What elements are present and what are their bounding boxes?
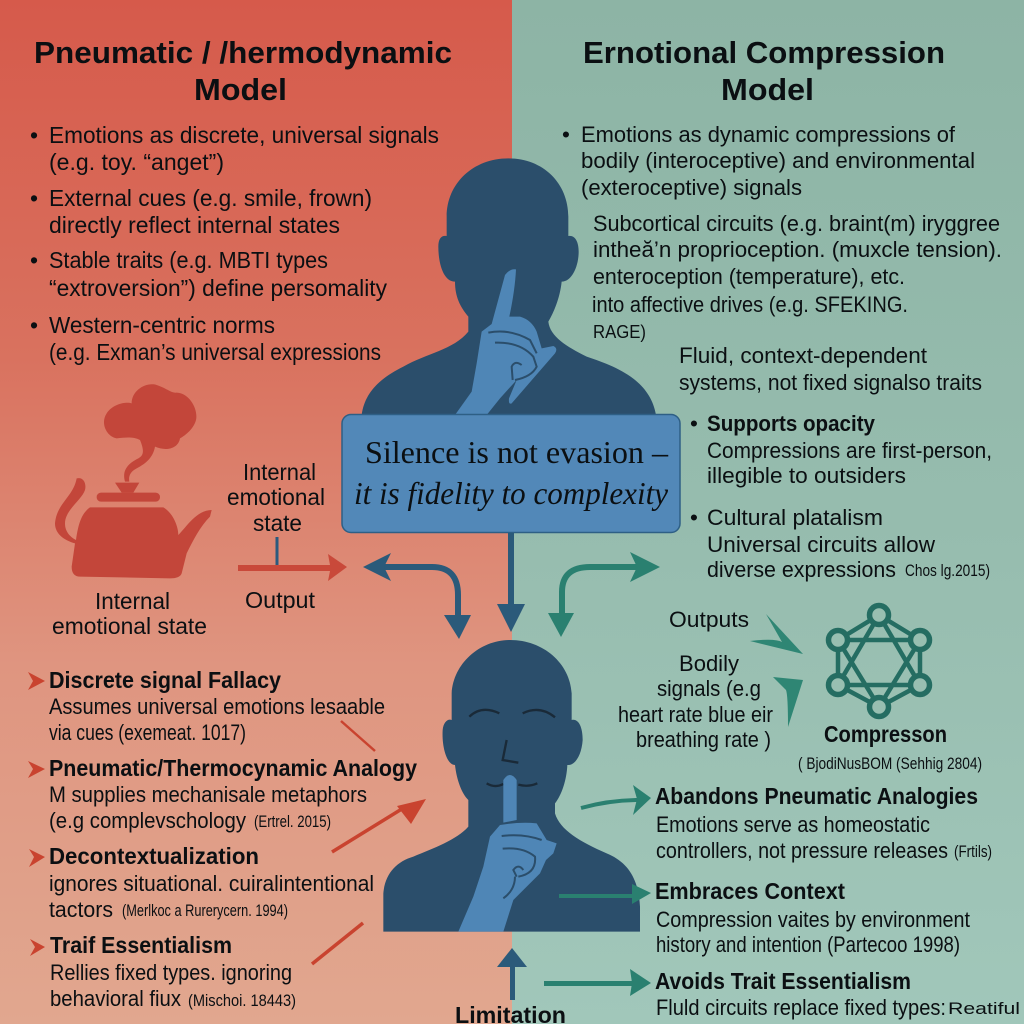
- advantage: embraces context: [655, 878, 971, 957]
- advantage: avoids trait essentialism: Fluld circuits replace fixed types:: [656, 995, 946, 1020]
- advantage: abandons pneumatic analogies: (Frtils): [954, 843, 992, 861]
- right bullet list and paragraphs: Emotions as dynamic compressions of: [581, 122, 956, 147]
- limitation: trait essentialism: Rellies fixed types. ignoring: [50, 960, 292, 985]
- label: internal emotional state (arrow): [227, 459, 325, 536]
- label: bodily signals: breathing rate ): [636, 727, 771, 752]
- limitation: trait essentialism: (Mischoi. 18443): [188, 992, 296, 1010]
- right bullet list and paragraphs: into affective drives (e.g. SFEKING.: [592, 292, 908, 317]
- panel: right background: [512, 0, 1024, 1024]
- right bullet list and paragraphs: Compressions are first-person,: [707, 438, 992, 463]
- limitation: decontextualization: (Merlkoc a Rurerycern. 1994): [122, 902, 288, 920]
- label: bodily signals: signals (e.g: [657, 676, 761, 701]
- right title: [583, 35, 945, 107]
- limitation: discrete signal fallacy: Discrete signal Fallacy: [49, 667, 281, 693]
- advantage: avoids trait essentialism: Reatiful: [948, 1000, 1020, 1018]
- label: compression: Compresson: [824, 721, 947, 747]
- left bullet list: •: [30, 247, 38, 273]
- limitation: thermodynamic analogy: (e.g complevschology: [49, 808, 247, 833]
- left bullet list: •: [30, 312, 38, 338]
- limitation: thermodynamic analogy: Pneumatic/Thermocynamic Analogy: [49, 755, 417, 781]
- advantage: abandons pneumatic analogies: [655, 783, 992, 863]
- right bullet list and paragraphs: (exteroceptive) signals: [581, 175, 802, 200]
- arrow: bodily signals to compression: [773, 677, 803, 727]
- right bullet list and paragraphs: bodily (interoceptive) and environmental: [581, 148, 975, 173]
- right bullet list and paragraphs: diverse expressions: [707, 557, 896, 582]
- label: internal emotional state (kettle): emotional state: [52, 613, 207, 639]
- center quote box: [342, 414, 680, 532]
- left bullet list: •: [30, 185, 38, 211]
- left bullet list: directly reflect internal states: [49, 212, 340, 238]
- label: bodily signals: [618, 651, 773, 752]
- connector arrow: center down: [497, 533, 525, 632]
- panel: left background: [0, 0, 512, 1024]
- right bullet list and paragraphs: [562, 122, 1002, 582]
- label: internal emotional state (arrow): state: [253, 510, 302, 536]
- arrow: to abandons pneumatic analogies: [581, 785, 651, 815]
- label: bodily signals: Bodily: [679, 651, 740, 676]
- advantage: embraces context: history and intention (Parteсoo 1998): [656, 932, 960, 957]
- right bullet list and paragraphs: •: [562, 122, 570, 147]
- left title: Pneumatic / /hermodynamic: [34, 35, 452, 70]
- icon: bottom silent figure: [383, 640, 640, 932]
- icon: compression network: [828, 606, 930, 716]
- label: internal emotional state (kettle): [52, 588, 207, 639]
- limitation: trait essentialism: Traif Essentialism: [50, 932, 232, 958]
- limitation: thermodynamic analogy: [28, 755, 417, 833]
- arrow: output: [238, 554, 347, 581]
- limitation: decontextualization: ignores situational. cuiralintentional: [49, 871, 374, 896]
- right bullet list and paragraphs: enteroception (temperature), etc.: [593, 264, 905, 289]
- arrow: outputs to compression: [750, 614, 803, 654]
- advantage: abandons pneumatic analogies: controllers, not pressure releases: [656, 838, 948, 863]
- limitation: discrete signal fallacy: [28, 667, 385, 745]
- center quote box: it is fidelity to complexity: [354, 475, 669, 511]
- label: internal emotional state (kettle): Internal: [95, 588, 170, 614]
- right bullet list and paragraphs: Cultural platalism: [707, 505, 883, 530]
- center quote box: Silence is not evasion –: [365, 434, 669, 470]
- left bullet list: Western-centric norms: [49, 312, 275, 338]
- label: outputs: Outputs: [669, 607, 749, 632]
- section: compression advantages: [655, 783, 1020, 1020]
- left title: Model: [194, 72, 287, 107]
- right title: Model: [721, 72, 814, 107]
- right bullet list and paragraphs: Chos lg.2015): [905, 562, 990, 580]
- left bullet list: (e.g. toy. “anget”): [49, 149, 224, 175]
- right bullet list and paragraphs: •: [690, 411, 698, 436]
- advantage: avoids trait essentialism: Avoids Trait Essentialism: [655, 968, 911, 994]
- arrow: to avoids trait essentialism: [544, 969, 651, 996]
- left bullet list: External cues (e.g. smile, frown): [49, 185, 372, 211]
- right bullet list and paragraphs: intheă’n proprioception. (muxcle tension).: [593, 237, 1002, 262]
- icon: whistling kettle with steam: [55, 384, 212, 578]
- left bullet list: (e.g. Exman’s universal expressions: [49, 339, 381, 365]
- advantage: abandons pneumatic analogies: Abandons Pneumatic Analogies: [655, 783, 978, 809]
- icon: tick line: [276, 537, 278, 565]
- red pointer lines: [312, 721, 426, 964]
- right bullet list and paragraphs: illegible to outsiders: [707, 463, 906, 488]
- label: compression: ( BjodiNusBOM (Sehhig 2804): [798, 755, 982, 773]
- limitation: discrete signal fallacy: Assumes universal emotions lesaable: [49, 694, 385, 719]
- left bullet list: •: [30, 122, 38, 148]
- advantage: embraces context: Compression vaites by environment: [656, 907, 971, 932]
- limitation: decontextualization: [29, 843, 374, 922]
- right bullet list and paragraphs: systems, not fixed signalso traits: [679, 370, 982, 395]
- right bullet list and paragraphs: RAGE): [593, 322, 646, 342]
- label: output: Output: [245, 587, 316, 613]
- left bullet list: [30, 122, 439, 365]
- limitation: discrete signal fallacy: via cues (exemeat. 1017): [49, 720, 246, 745]
- left bullet list: Stable traits (e.g. MBTI types: [49, 247, 328, 273]
- advantage: embraces context: Embraces Context: [655, 878, 845, 904]
- limitation: trait essentialism: [30, 932, 296, 1011]
- right bullet list and paragraphs: Universal circuits allow: [707, 532, 936, 557]
- label: internal emotional state (arrow): emotional: [227, 484, 325, 510]
- arrow: limitation upward: [497, 948, 527, 1000]
- connector arrow: dark double-headed: [363, 553, 471, 639]
- left bullet list: “extroversion”) define persomality: [49, 275, 387, 301]
- label: internal emotional state (arrow): Internal: [243, 459, 316, 485]
- advantage: abandons pneumatic analogies: Emotions serve as homeostatic: [656, 812, 930, 837]
- limitation: decontextualization: Decontextualization: [49, 843, 259, 869]
- connector arrow: green double-headed: [548, 552, 660, 637]
- advantage: avoids trait essentialism: [655, 968, 1020, 1020]
- right bullet list and paragraphs: Subcortical circuits (e.g. braint(m) iryggree: [593, 211, 1000, 236]
- right bullet list and paragraphs: •: [690, 505, 698, 530]
- arrow: to embraces context: [559, 884, 651, 904]
- label: compression: [798, 721, 982, 773]
- right title: Ernotional Compression: [583, 35, 945, 70]
- icon: top silent figure: [362, 158, 656, 415]
- left title: [34, 35, 452, 107]
- section: pneumatic limitations: [28, 667, 417, 1011]
- limitation: thermodynamic analogy: (Ertrel. 2015): [254, 813, 331, 831]
- left bullet list: Emotions as discrete, universal signals: [49, 122, 439, 148]
- right bullet list and paragraphs: Supports opacity: [707, 411, 875, 436]
- limitation: thermodynamic analogy: M supplies mechanisale metaphors: [49, 782, 367, 807]
- label: bodily signals: heart rate blue eir: [618, 702, 773, 727]
- right bullet list and paragraphs: Fluid, context-dependent: [679, 343, 928, 368]
- limitation: decontextualization: tactors: [49, 897, 113, 922]
- limitation: trait essentialism: behavioral fiux: [50, 986, 182, 1011]
